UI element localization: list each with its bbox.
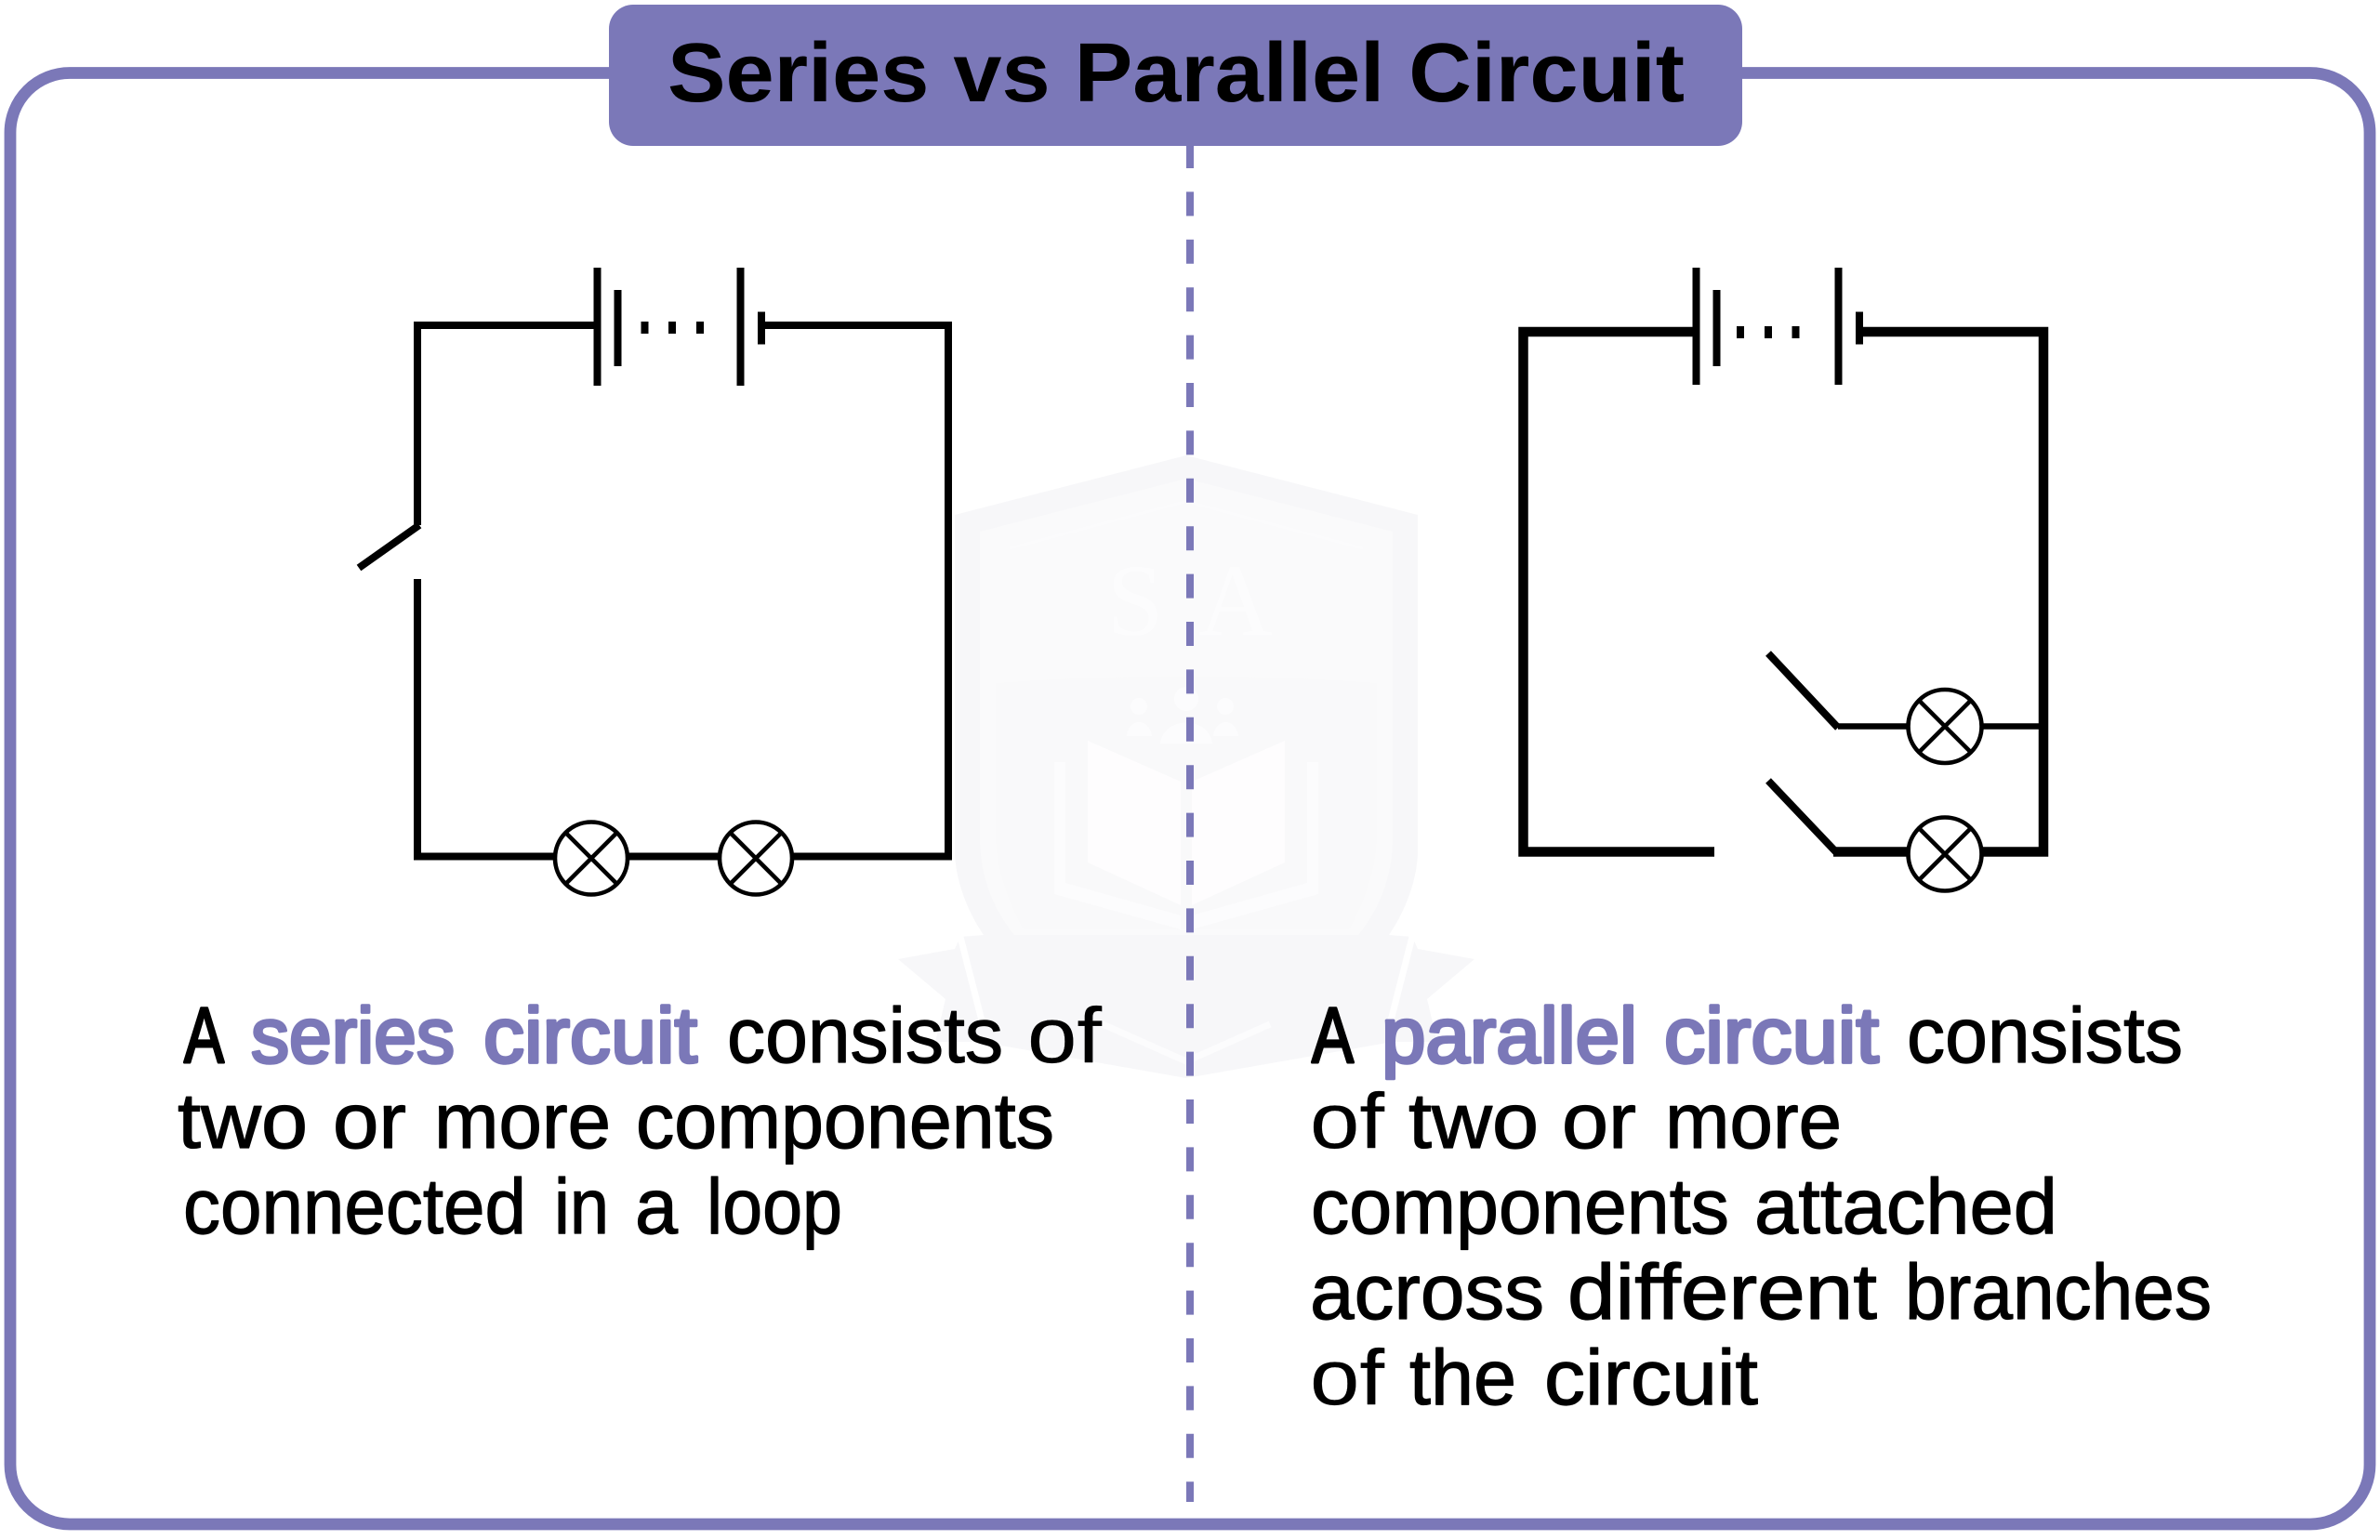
text: series circuit description: series xyxy=(251,992,455,1079)
lamp lower xyxy=(1908,818,1982,890)
title: Series vs Parallel Circuit xyxy=(668,27,1685,120)
switch xyxy=(359,525,419,568)
text: parallel circuit description: the xyxy=(1409,1334,1516,1421)
text: parallel circuit description: A xyxy=(1312,992,1354,1079)
text: parallel circuit description: branches xyxy=(1905,1248,2212,1336)
wires xyxy=(1523,332,2043,851)
text: series circuit description: circuit xyxy=(483,992,697,1079)
text: parallel circuit description: more xyxy=(1665,1077,1842,1165)
text: series circuit description: or xyxy=(333,1077,406,1165)
text: parallel circuit description: different xyxy=(1567,1248,1877,1336)
lamp 2 xyxy=(720,822,792,894)
text: parallel circuit description: of xyxy=(1310,1077,1385,1165)
title banner xyxy=(609,5,1742,146)
centre dashed divider xyxy=(1186,144,1194,1502)
text: parallel circuit description: circuit xyxy=(1544,1334,1758,1421)
text: series circuit description: more xyxy=(434,1077,611,1165)
text: series circuit description: connected xyxy=(183,1163,526,1250)
text: series circuit description: components xyxy=(636,1077,1054,1165)
text: parallel circuit description: attached xyxy=(1754,1163,2057,1250)
text: parallel circuit description: of xyxy=(1310,1334,1385,1421)
battery xyxy=(597,268,761,386)
watermark: shield crest: A xyxy=(1198,544,1273,657)
text: parallel circuit description: consists xyxy=(1907,992,2183,1079)
watermark: shield crest: S xyxy=(1106,544,1164,657)
text: parallel circuit description: or xyxy=(1562,1077,1636,1165)
text: parallel circuit description: parallel xyxy=(1382,992,1637,1079)
text: series circuit description: a xyxy=(635,1163,678,1250)
parallel circuit diagram xyxy=(1523,268,2043,890)
text: series circuit description: two xyxy=(178,1077,308,1165)
text: series circuit description: of xyxy=(1027,992,1103,1079)
text: series circuit description: consists xyxy=(727,992,1003,1079)
text: parallel circuit description: two xyxy=(1408,1077,1539,1165)
text: parallel circuit description: across xyxy=(1310,1248,1544,1336)
text: series circuit description: A xyxy=(184,992,224,1079)
text: parallel circuit description xyxy=(1310,992,2212,1421)
text: series circuit description: in xyxy=(554,1163,609,1250)
switch upper xyxy=(1768,653,1838,728)
text: parallel circuit description: components xyxy=(1311,1163,1729,1250)
lamp 1 xyxy=(555,822,628,894)
switch lower xyxy=(1768,781,1838,854)
series circuit diagram xyxy=(359,268,948,894)
watermark: shield crest xyxy=(898,455,1474,1078)
text: series circuit description xyxy=(178,992,1103,1250)
text: series circuit description: loop xyxy=(707,1163,842,1250)
text: parallel circuit description: circuit xyxy=(1664,992,1879,1079)
battery xyxy=(1696,268,1859,385)
wires xyxy=(417,325,948,857)
lamp upper xyxy=(1908,690,1982,763)
